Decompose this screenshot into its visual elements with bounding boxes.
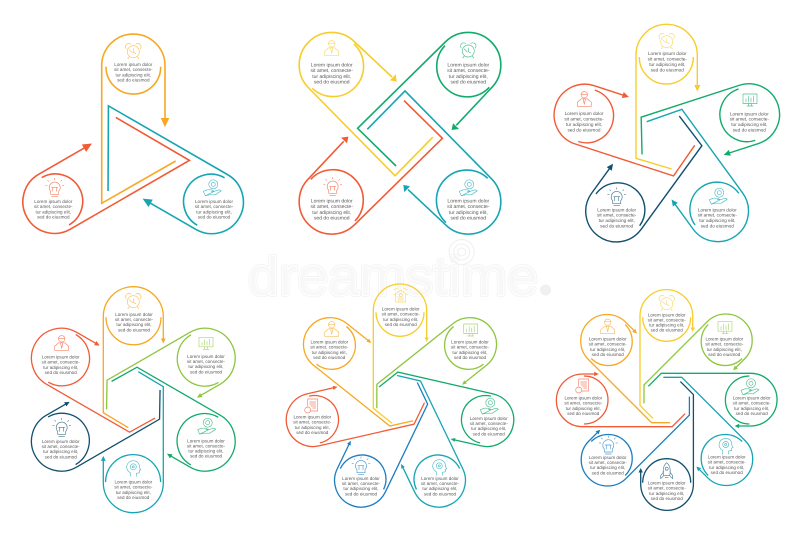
text: step 3: sed do eiusmod <box>736 411 768 416</box>
loop 3 teal <box>367 91 501 234</box>
text: step 6: tur adipiscing elit, <box>295 425 330 430</box>
diagram: eight-step cycle <box>556 290 777 510</box>
text: step 4: tur adipiscing elit, <box>709 465 744 470</box>
icon: person <box>55 336 69 350</box>
text: step 2: sed do eiusmod <box>198 215 231 220</box>
text: step 3: sit amet, consecte- <box>733 401 771 406</box>
text: step 2: sit amet, consecte- <box>451 345 490 350</box>
text: step 7: Lorem ipsum dolor <box>310 340 349 345</box>
text: step 4: sed do eiusmod <box>600 224 634 229</box>
text: step 8: sed do eiusmod <box>592 352 624 357</box>
icon: monitor chart <box>464 324 478 336</box>
text: step 4: tur adipiscing elit, <box>422 486 458 491</box>
loop 4 teal <box>634 368 764 498</box>
text: step 3: tur adipiscing elit, <box>471 426 506 431</box>
text: step 2: tur adipiscing elit, <box>452 350 488 355</box>
text: step 1: sed do eiusmod <box>314 80 350 86</box>
loop 1 orange <box>102 34 176 203</box>
icon: rocket <box>661 463 673 479</box>
loop 2 teal <box>71 106 255 255</box>
watermark: dreamstime <box>248 247 538 307</box>
text: step 2: sed do eiusmod <box>450 80 486 86</box>
icon: head with gear <box>719 438 733 454</box>
text: step 3: tur adipiscing elit, <box>734 406 769 411</box>
text: step 5: sit amet, consecte- <box>564 116 604 121</box>
loop 5 navy <box>638 382 693 510</box>
diagram: seven-step cycle <box>281 284 519 517</box>
text: step 3: sit amet, consecte- <box>698 213 737 218</box>
text: step 4: Lorem ipsum dolor <box>421 476 459 481</box>
text: step 1: tur adipiscing elit, <box>649 62 685 67</box>
text: step 1: sed do eiusmod <box>651 67 684 72</box>
text: step 1: sit amet, consecte- <box>114 67 153 72</box>
loop 5 blue <box>324 367 434 516</box>
loop 1 yellow <box>636 24 700 169</box>
loop 2 lime <box>635 303 765 433</box>
icon: alarm clock <box>461 43 476 58</box>
text: step 1: Lorem ipsum dolor <box>114 62 153 67</box>
icon: light bulb <box>608 188 626 206</box>
text: step 1: tur adipiscing elit, <box>116 322 152 327</box>
text: step 3: Lorem ipsum dolor <box>698 207 737 212</box>
text: step 2: Lorem ipsum dolor <box>705 337 744 342</box>
watermark: dreamstime <box>248 247 538 307</box>
text: step 1: sit amet, consecte- <box>311 68 353 74</box>
icon: person <box>325 322 339 336</box>
text: step 1: sed do eiusmod <box>385 322 417 327</box>
text: step 5: sed do eiusmod <box>345 491 378 496</box>
text: step 1: sed do eiusmod <box>651 328 683 333</box>
text: step 2: Lorem ipsum dolor <box>195 199 233 204</box>
loop 2 lime <box>365 307 509 437</box>
text: step 4: Lorem ipsum dolor <box>311 198 353 204</box>
text: step 2: sed do eiusmod <box>733 128 766 133</box>
text: step 3: Lorem ipsum dolor <box>470 416 508 421</box>
text: step 2: sed do eiusmod <box>708 352 741 357</box>
loop 6 red <box>20 315 174 440</box>
loop 4 teal <box>101 372 163 513</box>
icon: monitor chart <box>718 322 732 334</box>
text: step 4: Lorem ipsum dolor <box>114 480 153 485</box>
icon: light bulb <box>324 177 342 195</box>
text: step 5: tur adipiscing elit, <box>566 122 602 127</box>
text: step 3: Lorem ipsum dolor <box>733 396 771 401</box>
text: step 5: sed do eiusmod <box>651 496 683 501</box>
text: step 6: sit amet, consecte- <box>42 360 80 365</box>
text: step 8: tur adipiscing elit, <box>590 347 625 352</box>
loop 8 orange <box>570 302 700 432</box>
text: step 6: sed do eiusmod <box>45 370 77 375</box>
text: step 6: Lorem ipsum dolor <box>293 415 332 420</box>
text: step 6: sed do eiusmod <box>296 430 329 435</box>
text: step 1: sit amet, consecte- <box>648 317 686 322</box>
text: step 3: Lorem ipsum dolor <box>187 438 225 443</box>
text: step 3: Lorem ipsum dolor <box>34 199 73 204</box>
text: step 1: tur adipiscing elit, <box>383 317 418 322</box>
loop 7 red <box>556 372 685 427</box>
icon: light bulb <box>46 178 64 196</box>
icon: light bulb <box>53 418 71 436</box>
loop 1 yellow <box>373 284 429 423</box>
loop 1 yellow <box>299 32 433 176</box>
icon: hand with gear <box>480 398 498 414</box>
diagram: three-step triangle cycle <box>6 34 255 255</box>
text: step 5: Lorem ipsum dolor <box>42 439 80 444</box>
text: step 4: sed do eiusmod <box>117 495 150 500</box>
text: step 1: tur adipiscing elit, <box>649 322 684 328</box>
loop 1 orange <box>103 287 166 428</box>
text: step 3: sit amet, consecte- <box>34 204 73 209</box>
icon: person <box>325 41 339 55</box>
icon: plan board <box>394 288 408 302</box>
text: step 5: tur adipiscing elit, <box>343 486 379 491</box>
text: step 3: sed do eiusmod <box>701 224 734 229</box>
icon: light bulb <box>599 436 617 454</box>
text: step 5: sit amet, consecte- <box>342 481 381 486</box>
icon: light bulb <box>352 457 370 475</box>
text: step 3: Lorem ipsum dolor <box>447 198 490 204</box>
icon: document <box>576 379 589 393</box>
diagram: six-step hexagon cycle <box>19 287 247 513</box>
text: step 5: sit amet, consecte- <box>42 444 80 449</box>
loop 2 lime <box>94 317 247 442</box>
text: step 4: sed do eiusmod <box>711 470 743 475</box>
text: step 6: sit amet, consecte- <box>589 460 627 465</box>
loop 3 red <box>6 96 189 245</box>
text: step 1: sit amet, consecte- <box>115 317 154 322</box>
text: step 1: sit amet, consecte- <box>648 56 687 61</box>
loop 4 red <box>299 101 442 234</box>
watermark: dreamstime <box>248 247 538 307</box>
text: step 4: tur adipiscing elit, <box>116 490 151 495</box>
text: step 8: Lorem ipsum dolor <box>589 337 627 342</box>
text: step 2: sed do eiusmod <box>454 355 487 360</box>
icon: person <box>601 319 615 334</box>
text: step 2: sit amet, consecte- <box>447 68 490 74</box>
icon: hand with gear <box>709 188 727 204</box>
text: step 5: Lorem ipsum dolor <box>342 476 380 481</box>
text: step 1: sed do eiusmod <box>117 78 150 83</box>
loop 5 red <box>546 73 704 179</box>
text: step 7: sed do eiusmod <box>313 355 346 360</box>
text: step 6: sit amet, consecte- <box>293 420 332 425</box>
text: step 1: tur adipiscing elit, <box>312 74 351 80</box>
loop 2 green <box>358 32 501 166</box>
text: step 6: sed do eiusmod <box>592 470 624 475</box>
icon: hand with gear <box>198 418 216 434</box>
loop 5 navy <box>19 358 173 482</box>
icon: hand with gear <box>203 180 221 196</box>
text: step 7: sit amet, consecte- <box>310 345 349 350</box>
text: step 2: tur adipiscing elit, <box>188 364 224 369</box>
text: step 7: sed do eiusmod <box>567 411 600 416</box>
text: step 3: tur adipiscing elit, <box>36 209 71 214</box>
text: step 2: sit amet, consecte- <box>195 204 234 209</box>
text: step 3: sed do eiusmod <box>473 431 505 436</box>
text: step 6: tur adipiscing elit, <box>43 365 78 370</box>
loop 3 green <box>371 369 519 454</box>
text: step 1: tur adipiscing elit, <box>116 72 151 77</box>
icon: alarm clock <box>126 293 141 309</box>
text: step 2: tur adipiscing elit, <box>731 122 767 127</box>
icon: head with gear <box>433 460 447 475</box>
text: step 3: sit amet, consecte- <box>447 204 490 210</box>
text: step 4: Lorem ipsum dolor <box>597 207 637 212</box>
text: step 3: sed do eiusmod <box>190 454 223 459</box>
loop 2 green <box>631 76 788 182</box>
text: step 2: tur adipiscing elit, <box>196 209 232 214</box>
icon: hand with gear <box>741 379 759 395</box>
text: step 4: Lorem ipsum dolor <box>708 455 746 460</box>
text: step 4: sit amet, consecte- <box>311 204 353 210</box>
text: step 2: tur adipiscing elit, <box>707 347 742 352</box>
text: step 5: Lorem ipsum dolor <box>648 481 686 486</box>
text: step 5: sed do eiusmod <box>45 454 77 459</box>
text: step 2: Lorem ipsum dolor <box>187 354 225 359</box>
text: step 5: tur adipiscing elit, <box>43 449 78 454</box>
text: step 2: sit amet, consecte- <box>730 117 769 122</box>
icon: alarm clock <box>126 43 141 59</box>
text: step 4: sit amet, consecte- <box>708 460 746 465</box>
icon: head with gear <box>127 461 141 476</box>
text: step 3: tur adipiscing elit, <box>449 210 488 216</box>
text: step 7: tur adipiscing elit, <box>566 406 601 411</box>
icon: monitor chart <box>743 94 757 106</box>
text: step 3: sit amet, consecte- <box>470 421 508 426</box>
text: step 4: tur adipiscing elit, <box>599 218 635 223</box>
text: step 5: sed do eiusmod <box>567 127 601 132</box>
text: step 1: Lorem ipsum dolor <box>115 312 153 317</box>
loop 6 blue <box>569 367 699 497</box>
icon: document <box>305 399 318 413</box>
text: step 2: sit amet, consecte- <box>705 342 744 347</box>
loop 7 orange <box>293 305 436 435</box>
icon: person <box>577 92 591 106</box>
text: step 4: sed do eiusmod <box>424 491 457 496</box>
text: step 1: Lorem ipsum dolor <box>311 62 353 68</box>
text: step 3: sed do eiusmod <box>37 215 70 220</box>
text: step 5: tur adipiscing elit, <box>649 491 684 496</box>
text: step 4: sit amet, consecte- <box>421 481 460 486</box>
icon: alarm clock <box>659 33 674 49</box>
text: step 5: sit amet, consecte- <box>648 486 686 491</box>
diagram: four-step square cycle <box>299 32 501 234</box>
text: step 2: tur adipiscing elit, <box>449 74 488 80</box>
loop 6 red <box>281 367 429 452</box>
text: step 4: sed do eiusmod <box>314 216 350 222</box>
loop 1 yellow <box>640 290 695 418</box>
icon: alarm clock <box>659 295 674 311</box>
text: step 2: sit amet, consecte- <box>187 359 226 364</box>
text: step 1: Lorem ipsum dolor <box>382 307 420 312</box>
text: step 4: sit amet, consecte- <box>597 213 637 218</box>
text: step 4: tur adipiscing elit, <box>312 210 351 216</box>
text: step 2: Lorem ipsum dolor <box>730 111 769 116</box>
icon: monitor chart <box>199 337 213 349</box>
loop 4 teal <box>364 367 474 517</box>
loop 3 teal <box>624 101 761 256</box>
text: step 1: sed do eiusmod <box>118 327 151 332</box>
text: step 1: Lorem ipsum dolor <box>648 312 686 317</box>
text: step 5: Lorem ipsum dolor <box>565 111 604 116</box>
text: step 1: Lorem ipsum dolor <box>648 51 687 56</box>
text: step 3: tur adipiscing elit, <box>188 448 224 454</box>
text: step 1: sit amet, consecte- <box>382 312 420 317</box>
text: step 3: sed do eiusmod <box>450 216 486 222</box>
text: step 7: Lorem ipsum dolor <box>564 396 603 401</box>
text: step 2: Lorem ipsum dolor <box>447 62 490 68</box>
diagram: five-step pentagon cycle <box>546 24 788 256</box>
text: step 4: sit amet, consecte- <box>114 485 153 490</box>
text: step 7: sit amet, consecte- <box>564 401 603 406</box>
text: step 3: tur adipiscing elit, <box>699 218 735 223</box>
text: step 6: Lorem ipsum dolor <box>42 355 80 360</box>
text: step 7: tur adipiscing elit, <box>312 350 347 355</box>
loop 3 green <box>648 373 777 428</box>
text: step 2: Lorem ipsum dolor <box>451 340 489 345</box>
text: step 6: tur adipiscing elit, <box>590 465 625 470</box>
icon: hand with gear <box>459 180 477 196</box>
loop 4 navy <box>571 99 708 254</box>
text: step 3: sit amet, consecte- <box>187 443 226 448</box>
text: step 2: sed do eiusmod <box>190 369 223 374</box>
text: step 8: sit amet, consecte- <box>589 342 627 347</box>
text: step 6: Lorem ipsum dolor <box>589 455 627 460</box>
loop 3 green <box>93 360 246 484</box>
